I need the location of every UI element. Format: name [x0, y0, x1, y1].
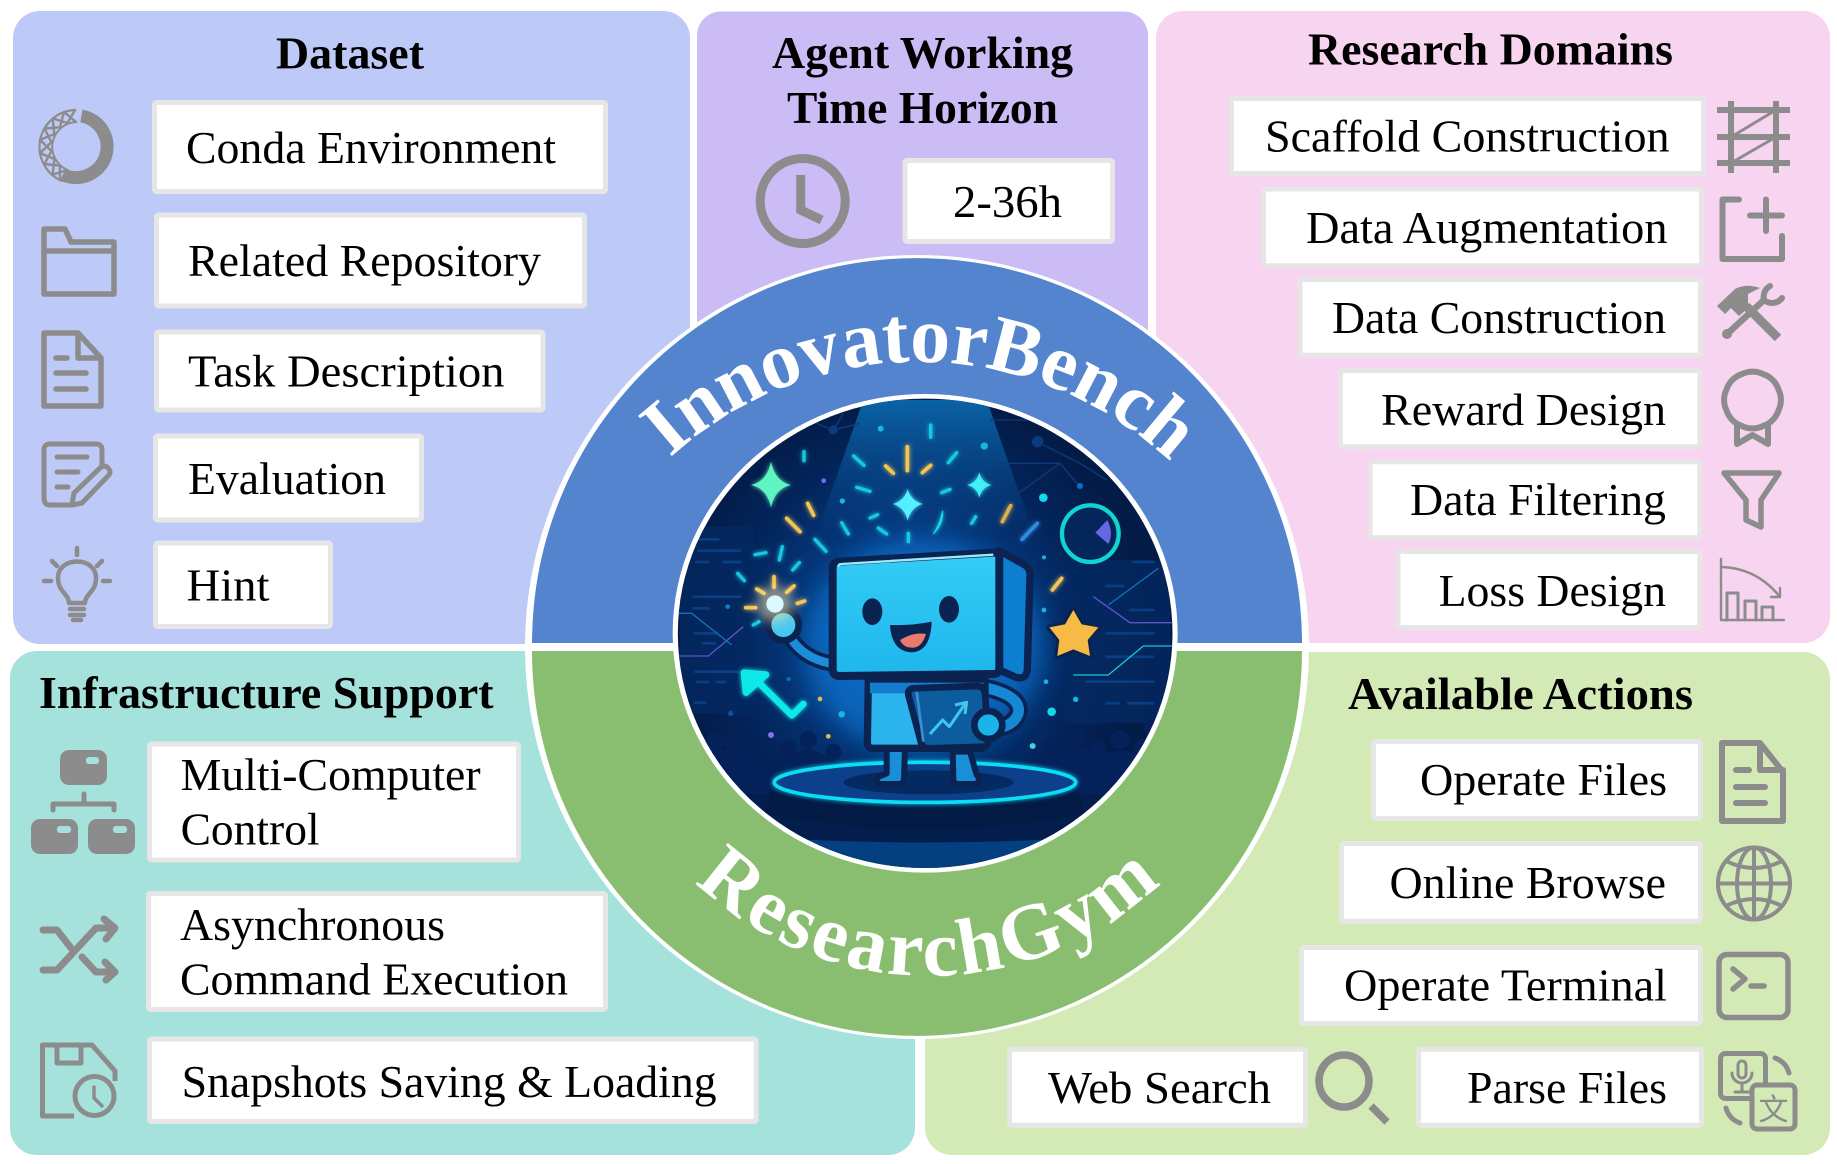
crowd	[697, 720, 1160, 807]
panel: research domains	[1156, 11, 1830, 643]
semicircle: ResearchGym: ResearchGym	[696, 843, 1160, 976]
item: time range: 2-36h	[953, 176, 1062, 227]
item: asynchronous command execution: Command Execution	[180, 954, 568, 1004]
item: operate files	[1374, 742, 1700, 818]
robot legs	[877, 748, 905, 784]
item: related repository	[156, 215, 584, 306]
item: conda environment: Conda Environment	[186, 122, 556, 173]
icon: reward badge	[1724, 372, 1781, 444]
item: task description	[156, 332, 543, 410]
icon: save with clock	[42, 1045, 115, 1116]
panel: dataset	[13, 11, 690, 644]
progress ring	[1062, 505, 1119, 562]
item: operate files: Operate Files	[1420, 754, 1667, 805]
spotlight	[824, 400, 1028, 518]
heading: infrastructure support: Infrastructure Support	[39, 667, 494, 718]
panel: agent working time horizon	[697, 12, 1148, 644]
item: hint	[156, 543, 330, 626]
icon: terminal	[1719, 954, 1788, 1018]
icon: globe	[1718, 848, 1790, 920]
robot arms	[785, 627, 1019, 728]
item: operate terminal: Operate Terminal	[1344, 960, 1667, 1010]
item: asynchronous command execution	[148, 894, 606, 1010]
dots	[725, 426, 1083, 749]
item: operate terminal	[1302, 948, 1700, 1024]
item: related repository: Related Repository	[188, 235, 541, 286]
icon: loss chart	[1721, 559, 1784, 620]
icon: voice translate	[1720, 1054, 1795, 1129]
item: parse files: Parse Files	[1467, 1062, 1667, 1113]
item: data construction	[1300, 280, 1700, 355]
item: online browse	[1342, 844, 1700, 921]
item: hint: Hint	[186, 560, 270, 610]
item: loss design	[1398, 552, 1700, 628]
heading: research domains: Research Domains	[1308, 24, 1673, 74]
item: reward design: Reward Design	[1381, 384, 1666, 435]
sparkles	[751, 462, 992, 534]
confetti dashes	[738, 425, 1062, 625]
item: multi-computer control: Control	[181, 804, 320, 854]
robot tablet	[908, 686, 988, 748]
item: task description: Task Description	[188, 346, 505, 396]
item: data construction: Data Construction	[1332, 292, 1666, 343]
robot torso	[867, 680, 985, 748]
heading: agent working time horizon: Agent Working	[772, 27, 1073, 78]
item: asynchronous command execution: Asynchronous	[180, 899, 445, 950]
robot hands	[768, 610, 799, 640]
stage	[744, 757, 1106, 868]
item: online browse: Online Browse	[1390, 857, 1666, 908]
illustration: robot on stage	[672, 394, 1178, 873]
robot	[768, 551, 1030, 784]
item: evaluation	[156, 436, 422, 520]
item: data augmentation	[1264, 189, 1702, 266]
item: multi-computer control	[150, 744, 518, 860]
item: web search: Web Search	[1048, 1062, 1271, 1113]
icon: file	[1722, 743, 1783, 821]
semicircle: InnovatorBench: InnovatorBench	[638, 316, 1188, 460]
item: data augmentation: Data Augmentation	[1306, 202, 1668, 253]
item: data filtering: Data Filtering	[1410, 474, 1666, 525]
white ring	[525, 255, 1309, 1039]
panel: available actions	[925, 652, 1830, 1155]
glowing fingertip	[757, 586, 793, 622]
item: conda environment	[154, 102, 606, 192]
robot face	[862, 596, 959, 652]
icon: evaluation note	[44, 444, 110, 505]
heading: dataset: Dataset	[276, 28, 425, 78]
icon: scaffold bracing	[1731, 110, 1776, 163]
cyan arrow	[744, 673, 803, 715]
icon: add to box	[1722, 200, 1782, 259]
semicircle: InnovatorBench	[532, 258, 1302, 643]
item: evaluation: Evaluation	[188, 453, 386, 504]
icon: scaffold	[1717, 101, 1790, 173]
gold star	[1049, 610, 1098, 656]
item: scaffold construction	[1232, 98, 1704, 174]
heading: agent working time horizon	[772, 27, 1073, 133]
icon: document	[44, 333, 101, 406]
heading: available actions: Available Actions	[1348, 668, 1693, 719]
icon: shuffle	[43, 919, 115, 980]
item: loss design: Loss Design	[1439, 565, 1666, 616]
circuit lines	[678, 413, 1173, 675]
item: time range	[905, 160, 1112, 242]
icon: hammer and wrench	[1717, 286, 1782, 339]
icon: magnifier	[1319, 1055, 1387, 1122]
item: scaffold construction: Scaffold Construction	[1265, 110, 1670, 162]
icon: clock	[760, 158, 845, 244]
item: snapshots saving and loading: Snapshots Saving & Loading	[182, 1056, 717, 1107]
icon: voice translate: 文	[1758, 1085, 1788, 1129]
robot head side	[999, 551, 1030, 678]
icon: light bulb	[44, 548, 110, 620]
icon: funnel	[1724, 473, 1779, 527]
robot head front	[833, 553, 999, 676]
item: web search	[1010, 1049, 1306, 1125]
item: multi-computer control: Multi-Computer	[181, 749, 481, 800]
icon: computer network	[31, 750, 135, 854]
server racks	[680, 527, 1170, 723]
glow behind robot	[803, 540, 1043, 753]
heading: agent working time horizon: Time Horizon	[787, 82, 1058, 133]
center medallion	[525, 255, 1309, 1039]
item: parse files	[1418, 1049, 1702, 1125]
item: data filtering	[1370, 462, 1700, 538]
item: reward design	[1340, 370, 1700, 447]
item: snapshots saving and loading	[150, 1039, 756, 1122]
semicircle: ResearchGym	[532, 651, 1302, 1036]
panel: infrastructure support	[10, 651, 915, 1155]
icon: conda ring	[40, 110, 107, 181]
icon: folder	[44, 229, 114, 294]
